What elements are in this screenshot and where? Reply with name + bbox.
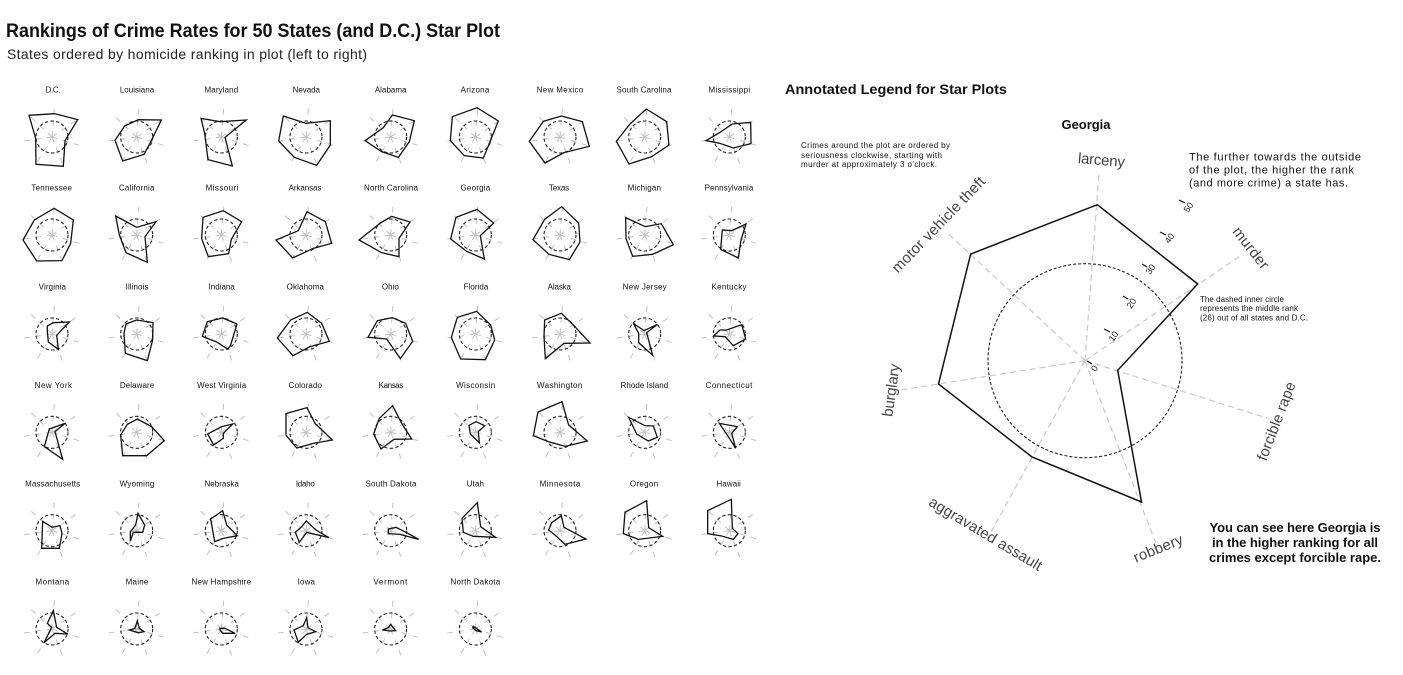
note: crime ordering — [801, 141, 950, 169]
star plot: Ohio — [363, 283, 418, 360]
axis label: larceny: larceny — [1077, 150, 1126, 171]
star plot: Wyoming: Wyoming — [120, 479, 154, 488]
legend heading: Annotated Legend for Star Plots — [785, 81, 1007, 97]
star plot: Minnesota: Minnesota — [540, 479, 581, 488]
star plot: D.C. — [24, 86, 79, 166]
star plot: New Mexico: New Mexico — [537, 86, 584, 95]
axis label: robbery: robbery — [1131, 531, 1186, 566]
star plot: Wisconsin — [447, 381, 502, 459]
star plot: Minnesota — [532, 479, 587, 557]
star plot: Illinois: Illinois — [126, 283, 148, 292]
star plot: Indiana — [193, 283, 248, 360]
scale ticks: 10 — [1107, 329, 1120, 343]
star plot: California: California — [119, 184, 155, 193]
star plot: Indiana: Indiana — [208, 283, 235, 292]
star plot: Mississippi: Mississippi — [708, 86, 750, 95]
note: dashed inner circle: represents the middle rank — [1200, 304, 1299, 313]
star plot: North Dakota — [447, 578, 502, 655]
star plot: Delaware — [109, 381, 164, 459]
note: dashed inner circle: (26) out of all states and D.C. — [1200, 314, 1308, 322]
star plot: Washington — [532, 381, 587, 459]
star plot: North Dakota: North Dakota — [450, 578, 501, 587]
scale ticks: 30 — [1144, 262, 1157, 276]
star plot: New Jersey: New Jersey — [623, 283, 667, 292]
legend plot title: Georgia: Georgia — [1062, 117, 1111, 132]
star plot: Kansas: Kansas — [379, 381, 403, 390]
star plot: Delaware: Delaware — [120, 381, 155, 390]
star plot: Arizona — [447, 86, 502, 163]
note: dashed inner circle: The dashed inner circle — [1200, 295, 1285, 304]
star plot: Colorado: Colorado — [289, 381, 323, 390]
star plot: Virginia: Virginia — [39, 283, 67, 292]
star plot: Alabama — [363, 86, 418, 163]
axis label: burglary: burglary — [879, 362, 904, 418]
star plot: Hawaii — [701, 479, 756, 557]
note: dashed inner circle — [1200, 295, 1308, 322]
star plot: Connecticut — [701, 381, 756, 459]
scale ticks: 50 — [1182, 200, 1195, 214]
star plot: Idaho — [278, 479, 333, 557]
star plot: Colorado — [278, 381, 333, 459]
star plot: South Carolina: South Carolina — [616, 86, 672, 95]
scale ticks: 40 — [1163, 231, 1176, 245]
scale ticks: 0 — [1089, 363, 1100, 373]
star plot: Oregon: Oregon — [630, 479, 658, 488]
star plot: South Dakota — [363, 479, 419, 557]
callout: Georgia conclusion: in the higher ranking for all — [1212, 535, 1378, 550]
star plot: Georgia: Georgia — [460, 184, 491, 193]
star plot: Nevada — [278, 86, 333, 165]
star plot: Missouri: Missouri — [206, 184, 239, 193]
legend star plot: Georgia — [898, 173, 1267, 543]
star plot: South Dakota: South Dakota — [366, 479, 417, 488]
callout: Georgia conclusion: crimes except forcible rape. — [1209, 550, 1381, 565]
star plot: Washington: Washington — [537, 381, 582, 390]
star plot: Connecticut: Connecticut — [706, 381, 753, 390]
star plot: West Virginia — [193, 381, 248, 459]
star plot: Wyoming — [109, 479, 164, 557]
star plot: Florida: Florida — [464, 283, 489, 292]
star plot: Texas — [532, 184, 587, 261]
star plot: Alaska — [532, 283, 590, 360]
star plot: Arizona: Arizona — [461, 86, 490, 95]
star plot: Texas: Texas — [549, 184, 569, 193]
axis label: forcible rape: forcible rape — [1254, 380, 1300, 463]
star plot: Ohio: Ohio — [382, 283, 399, 292]
star plot: West Virginia: West Virginia — [197, 381, 247, 390]
star plot: Alabama: Alabama — [375, 86, 407, 95]
callout: Georgia conclusion: You can see here Georgia is — [1210, 520, 1380, 535]
note: crime ordering: Crimes around the plot are ordered by — [801, 141, 950, 150]
star plot: Vermont: Vermont — [373, 578, 408, 587]
star plot: New Hampshire: New Hampshire — [191, 578, 252, 587]
star plot: Maryland: Maryland — [204, 86, 238, 95]
star plot: Maine — [109, 578, 164, 655]
star plot: Mississippi — [701, 86, 756, 163]
star plot: Vermont — [363, 578, 418, 655]
star plot: Michigan: Michigan — [628, 184, 661, 193]
star plot: Hawaii: Hawaii — [716, 479, 741, 488]
note: crime ordering: murder at approximately 3 o'clock. — [801, 160, 937, 169]
star plot: Pennsylvania — [701, 184, 756, 261]
star plot: Louisiana — [109, 86, 164, 163]
star plot: Nevada: Nevada — [293, 86, 321, 95]
star plot: Oklahoma — [277, 283, 333, 360]
star plot: Rhode Island: Rhode Island — [620, 381, 668, 390]
star plot: South Carolina — [616, 86, 672, 164]
title: Rankings of Crime Rates for 50 States (and D.C.) Star Plot — [6, 21, 501, 42]
star plot: Virginia — [24, 283, 79, 360]
star plot: Wisconsin: Wisconsin — [456, 381, 495, 390]
star plot: Massachusetts — [24, 479, 80, 557]
note: outside means higher rank: The further towards the outside — [1189, 152, 1361, 164]
star plot: Missouri — [193, 184, 248, 261]
callout: Georgia conclusion — [1209, 520, 1381, 565]
scale ticks: 20 — [1125, 296, 1138, 310]
star plot: Kentucky: Kentucky — [711, 283, 746, 292]
note: outside means higher rank — [1189, 152, 1361, 190]
star plot: Alaska: Alaska — [548, 283, 572, 292]
note: outside means higher rank: (and more crime) a state has. — [1189, 178, 1348, 190]
star plot: Idaho: Idaho — [296, 479, 315, 488]
star plot: Maryland — [193, 86, 248, 166]
note: outside means higher rank: of the plot, the higher the rank — [1189, 164, 1354, 176]
star plot: Illinois — [109, 283, 164, 361]
star plot: Iowa — [278, 578, 333, 655]
star plot: Rhode Island — [617, 381, 672, 459]
star plot: Maine: Maine — [126, 578, 149, 587]
star plot: Utah — [447, 479, 502, 557]
star plot: Tennessee — [23, 184, 79, 261]
star plot: D.C.: D.C. — [46, 86, 60, 95]
star plot: Kansas — [363, 381, 418, 459]
star plot: Nebraska — [193, 479, 248, 557]
star plot: Montana — [24, 578, 79, 655]
note: crime ordering: seriousness clockwise, starting with — [801, 151, 942, 160]
star plot: Massachusetts: Massachusetts — [25, 479, 80, 488]
star plot: North Carolina — [359, 184, 419, 261]
star plot: Louisiana: Louisiana — [120, 86, 155, 95]
axis label: aggravated assault: aggravated assault — [926, 494, 1046, 575]
axis label: murder: murder — [1229, 224, 1272, 273]
star plot: Montana: Montana — [35, 578, 70, 587]
star plot: California — [109, 184, 164, 262]
star plot: New Mexico — [529, 86, 589, 163]
star plot: New York — [24, 381, 79, 459]
star plot: Pennsylvania: Pennsylvania — [705, 184, 754, 193]
scale ticks — [1087, 200, 1195, 373]
star plot: Michigan — [617, 184, 673, 261]
star plot: Nebraska: Nebraska — [204, 479, 239, 488]
star plot: North Carolina: North Carolina — [364, 184, 419, 193]
star plot: Oregon — [617, 479, 672, 557]
star plot: New York: New York — [35, 381, 72, 390]
star plot: Oklahoma: Oklahoma — [287, 283, 325, 292]
star plot: Arkansas: Arkansas — [289, 184, 321, 193]
star plot: Iowa: Iowa — [298, 578, 316, 587]
star plot: Tennessee: Tennessee — [31, 184, 73, 193]
subtitle: States ordered by homicide ranking in plot (left to right) — [7, 46, 367, 62]
star plot: Kentucky — [701, 283, 756, 360]
star plot: Georgia — [447, 184, 502, 261]
star plot: Utah: Utah — [467, 479, 484, 488]
star plot: New Jersey — [617, 283, 672, 360]
star plot: Florida — [447, 283, 502, 360]
star plot: Arkansas — [276, 184, 333, 261]
axis label: motor vehicle theft: motor vehicle theft — [889, 173, 990, 276]
star plot: New Hampshire — [191, 578, 252, 655]
